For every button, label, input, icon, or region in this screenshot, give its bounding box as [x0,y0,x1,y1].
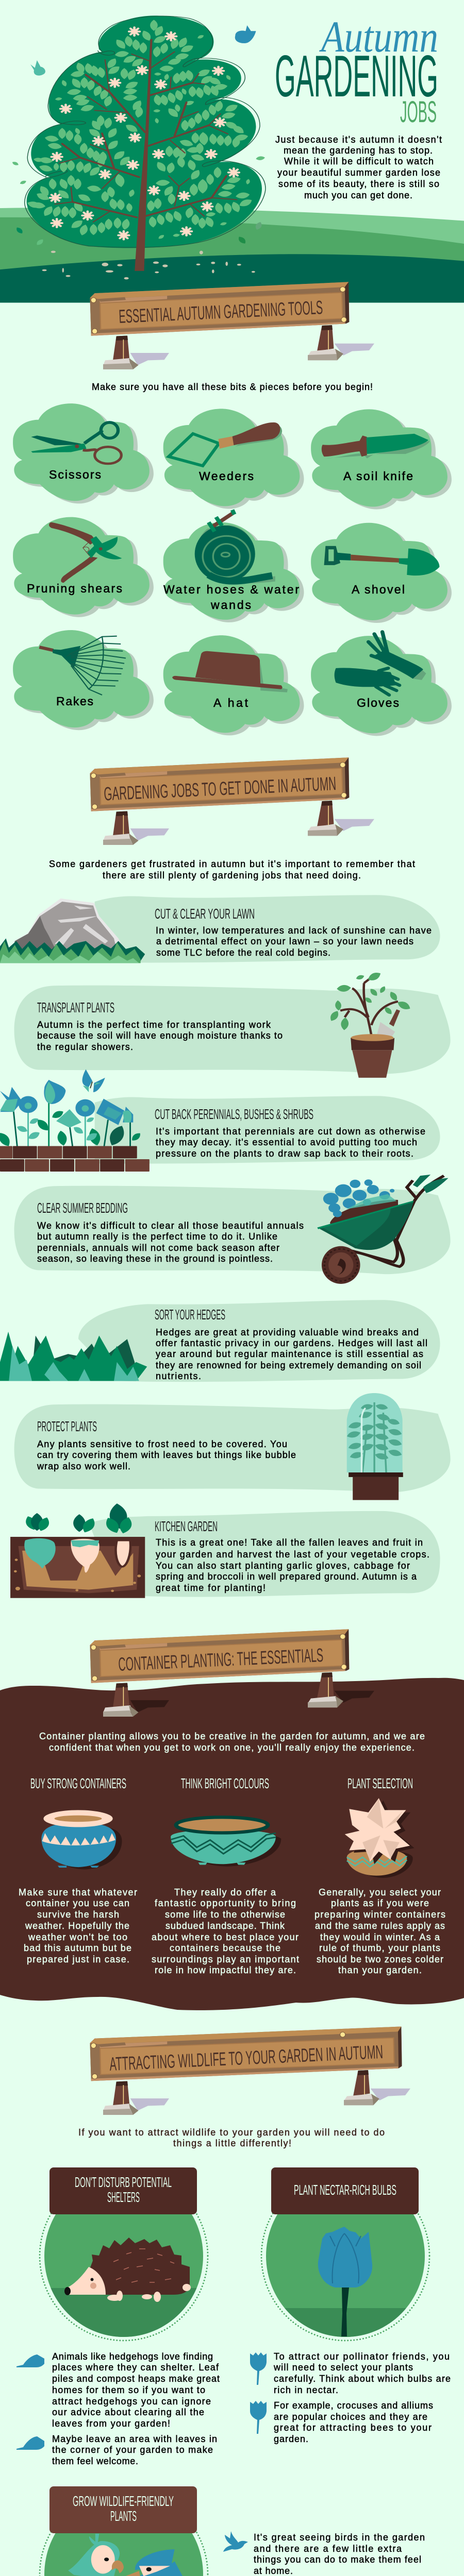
body text: You can also start planting garlic gloves, cabbage for [156,1561,410,1571]
icon: scissors [31,422,121,464]
illustration circle: hedgehog [39,2213,208,2341]
body text: your garden and harvest the last of your vegetable crops. [156,1549,429,1560]
column: think bright colours: THINK BRIGHT COLOURS [181,1775,269,1791]
tool labels [27,468,413,709]
body text: some life to the otherwise [165,1909,285,1920]
body text: than your garden. [338,1965,422,1975]
sign: container planting [90,1629,374,1717]
heading box: SHELTERS [107,2189,140,2205]
body text: season, so leaving these in the ground is pointless. [37,1253,273,1264]
body text: offer fantastic privacy in our gardens. Hedges will last all [156,1338,427,1348]
sign: gardening jobs [90,757,374,845]
body text: They really do offer a [174,1887,276,1897]
body text: great for attracting bees to your [274,2422,432,2433]
sign: essential autumn gardening tools [90,282,374,369]
title [275,12,438,129]
body text: year around but regular maintenance is still essential as [156,1349,423,1359]
body text: and the same rules apply as [315,1921,445,1931]
body text: This is a great one! Take all the fallen leaves and fruit in [156,1537,423,1548]
body text [156,1537,429,1593]
body text [156,1327,427,1381]
body text: Autumn is the perfect time for transplanting work [37,1020,271,1030]
column: think bright colours [152,1775,299,1975]
panel: protect plants [14,1393,451,1500]
body text: It's important that perennials are cut down as otherwise [156,1126,425,1137]
body text: attract hedgehogs you can ignore [52,2396,211,2406]
intro text: mean the gardening has to stop. [284,145,433,156]
body text: great time for planting! [156,1583,266,1593]
body text: they may decay. it's essential to avoid putting too much [156,1137,417,1147]
body text: are popular choices and they are [274,2412,427,2422]
body text: For example, crocuses and alliums [274,2400,433,2411]
wildlife intro: If you want to attract wildlife to your garden you will need to do [78,2127,385,2138]
icon: teal bowl [171,1817,281,1867]
body text: preparing winter containers [314,1909,445,1920]
icon: blue hedgehog [16,2354,44,2367]
body text: Make sure that whatever [19,1887,137,1897]
icon: blue bird [235,25,256,43]
intro text: While it will be difficult to watch [284,156,434,166]
panel: sort your hedges [0,1300,440,1382]
panel: grow wildlife-friendly plants [40,2486,431,2576]
body text: they are renowned for being extremely demanding on soil [156,1360,421,1370]
panel: transplant plants [14,971,451,1078]
body text: survive the harsh [37,1909,119,1920]
body text: them feel welcome. [52,2456,138,2466]
body text: the corner of your garden to make [52,2445,213,2455]
body text: places where they can shelter. Leaf [52,2362,219,2372]
icon: weeder [169,422,282,466]
body text: weather won't be too [28,1932,127,1942]
body text: Generally, you select your [319,1887,441,1897]
body text [156,1126,425,1159]
body text: Any plants sensitive to frost need to be covered. You [37,1439,287,1449]
tool labels: wands [210,598,251,612]
intro text: your beautiful summer garden lose [277,167,440,178]
panel: sort your hedges: SORT YOUR HEDGES [155,1307,225,1323]
panel: cut and clear your lawn [0,895,440,963]
panel: clear summer bedding [14,1175,451,1284]
body text [152,1887,299,1975]
body text: and there are a few little extra [254,2544,402,2554]
body text: because the soil will have enough moisture thanks to [37,1030,283,1041]
body text: containers because the [170,1943,280,1953]
body text: at home. [254,2566,293,2576]
panel: kitchen garden: KITCHEN GARDEN [155,1518,218,1534]
body text: fantastic opportunity to bring [155,1898,296,1908]
heading box [49,2167,197,2214]
body text: leaves from your garden! [52,2418,170,2429]
body text: should be two zones colder [317,1954,443,1964]
heading: CUT & CLEAR YOUR LAWN [155,906,255,922]
intro text: Just because it's autumn it doesn't [275,134,442,145]
body text [254,2532,425,2576]
body text: homes for them so if you want to [52,2385,205,2395]
jobs intro: there are still plenty of gardening jobs that need doing. [103,870,361,880]
body text [274,2400,433,2444]
panel: clear summer bedding: CLEAR SUMMER BEDDING [37,1200,128,1216]
body text: some TLC before the real cold begins. [156,947,330,958]
body text: can try covering them with leaves but things like bubble [37,1450,296,1460]
panel: kitchen garden [10,1503,440,1598]
body text: role in how impactful they are. [155,1965,296,1975]
panel: tools grid [13,403,452,736]
icon: hedge [0,1332,147,1381]
heading: CUT BACK PERENNIALS, BUSHES & SHRUBS [155,1106,313,1122]
sign: attracting wildlife [90,2026,410,2115]
body text: Animals like hedgehogs love finding [52,2351,213,2362]
panel: plant nectar-rich bulbs [250,2167,451,2444]
tree trunk and branches [55,39,237,271]
body text: nutrients. [156,1371,201,1381]
body text: In winter, low temperatures and lack of sunshine can have [156,925,432,936]
tree illustration [11,15,266,271]
body text [273,2351,451,2395]
tool labels: Weeders [199,469,254,483]
panel: cut back perennials [0,1070,440,1172]
tools subtitle: Make sure you have all these bits & pieces before you begin! [92,382,373,392]
falling leaves [11,156,266,246]
body text: but autumn really is the perfect time to do it. Unlike [37,1231,277,1242]
icon: rake [39,636,126,695]
icon: hat [172,651,288,692]
icon: potted plant with trowel [328,971,412,1078]
icon: bell jar plant [345,1393,403,1500]
heading box [271,2167,419,2214]
icon: succulent pot [345,1798,415,1878]
tool clouds [13,403,452,736]
intro text: much you can get done. [304,190,412,200]
body text: the regular showers. [37,1042,133,1052]
body text: spring and broccoli in well prepared ground. Autumn is a [156,1571,417,1582]
body text: Maybe leave an area with leaves in [52,2434,217,2444]
panel: don't disturb potential shelters [16,2167,220,2466]
tree blossoms [50,27,239,240]
icon: blue pot [41,1810,122,1870]
body text: plants as if you were [331,1898,429,1908]
title: Autumn [319,12,438,61]
canopy outline [25,16,266,247]
body text: pressure on the plants to draw sap back to their roots. [156,1148,413,1159]
tool labels: A soil knife [343,469,413,483]
body text: We know it's difficult to clear all those beautiful annuals [37,1221,304,1231]
panel: protect plants: PROTECT PLANTS [37,1418,97,1434]
jobs intro: Some gardeners get frustrated in autumn but it's important to remember that [49,859,415,869]
body text: bad this autumn but be [24,1943,131,1953]
icon: wheelbarrow [317,1175,449,1284]
body text: container you use can [26,1898,129,1908]
tool labels: A hat [213,696,248,709]
body text [37,1020,283,1052]
body text: our advice about clearing all the [52,2407,204,2417]
body text [314,1887,445,1975]
wildlife intro [78,2127,385,2148]
icon: pruning shears [49,522,122,583]
tree leaves [26,20,254,240]
icon: shovel [324,546,439,575]
body text: surroundings play an important [152,1954,299,1964]
wildlife intro: things a little differently! [173,2138,291,2148]
body text [19,1887,137,1964]
icon: blue hedgehog [16,2436,44,2450]
tool labels: Gloves [357,696,399,709]
icon: rock and grass [0,899,145,963]
body text [37,1221,304,1264]
tool labels: Rakes [56,694,93,708]
column: buy strong containers: BUY STRONG CONTAINERS [30,1775,126,1791]
body text: rich in nectar. [274,2385,338,2395]
body text: garden. [274,2434,308,2444]
icon: water hose [195,510,275,584]
body text [156,925,432,958]
heading box: PLANTS [110,2508,137,2524]
icon: gloves [335,632,426,695]
body text: they would in winter. As a [320,1932,440,1942]
icon: soil knife [322,434,429,459]
body text: piles and compost heaps make great [52,2374,220,2384]
body text: things you can do to make them feel [254,2554,421,2565]
body text: will need to select your plants [273,2362,413,2372]
intro text [275,134,442,200]
bricks [0,1146,150,1172]
body text [52,2351,220,2429]
icon: blue tulip [250,2352,267,2385]
jobs intro [49,859,415,880]
body text: a detrimental effect on your lawn – so your lawn needs [156,936,413,946]
rolling green hills [0,208,464,302]
body text: about where to best place your [152,1932,299,1942]
body text: wrap also work well. [37,1461,130,1471]
body text: perennials, annuals will not come back season after [37,1243,279,1253]
tool labels: Scissors [49,468,101,481]
body text: To attract our pollinator friends, you [274,2351,450,2362]
tool labels: Pruning shears [27,582,122,595]
illustration circle: tulip [261,2213,430,2341]
heading box [49,2486,197,2533]
intro text: some of its beauty, there is still so [278,179,439,189]
column: buy strong containers [19,1775,137,1964]
body text: rule of thumb, your plants [319,1943,440,1953]
body text [37,1439,296,1471]
container intro: Container planting allows you to be creative in the garden for autumn, and we are [39,1731,425,1741]
column: plant selection [314,1775,445,1975]
body text [52,2434,217,2466]
body text: weather. Hopefully the [25,1921,129,1931]
body text: subdued landscape. Think [165,1921,285,1931]
body text: prepared just in case. [27,1954,129,1964]
icon: vegetables in soil [10,1503,145,1598]
tree canopy [27,15,262,248]
container intro: confident that when you get to work on one, you'll really enjoy the experience. [49,1742,415,1753]
icon: teal bird [30,60,45,76]
panel: container planting background [0,1678,464,2010]
tool labels: Water hoses & water [163,583,299,596]
container intro [39,1731,425,1753]
heading box: DON'T DISTURB POTENTIAL [75,2174,172,2190]
icon: blue bird [223,2531,248,2552]
body text: It's great seeing birds in the garden [254,2532,425,2543]
heading box: GROW WILDLIFE-FRIENDLY [73,2493,174,2509]
panel: transplant plants: TRANSPLANT PLANTS [37,999,114,1015]
body text: carefully. Think about which bulbs are [274,2374,451,2384]
icon: blue tulip [250,2401,267,2434]
icon: flower bed with bricks and butterfly [0,1070,150,1172]
body text: Hedges are great at providing valuable wind breaks and [156,1327,419,1337]
illustration circle: birds [39,2532,208,2576]
tool labels: A shovel [352,583,405,596]
